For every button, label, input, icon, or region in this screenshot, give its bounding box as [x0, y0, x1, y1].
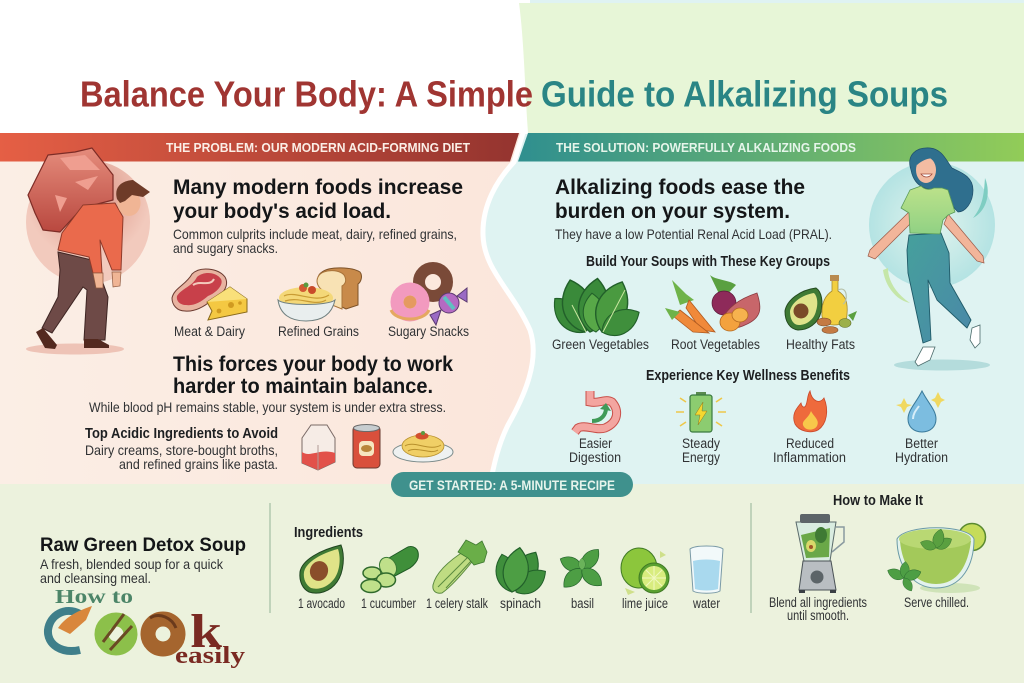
icon: flame: [794, 391, 827, 432]
icon: root vegetables: [665, 275, 760, 333]
icon: healthy fats: [785, 275, 857, 334]
title: [80, 74, 948, 114]
text: reduced inflammation: [773, 436, 846, 465]
heading: acid load: [173, 175, 463, 223]
icon: sugary snacks: [391, 268, 467, 325]
dividers: [270, 503, 751, 613]
heading: key groups: Build Your Soups with These Key Groups: [586, 254, 830, 270]
label: water: water: [692, 596, 720, 611]
heading: work harder: [173, 352, 453, 398]
icon: battery: [676, 392, 726, 432]
label: refined grains: Refined Grains: [278, 324, 359, 339]
text: blend step: Blend all ingredients: [769, 595, 867, 610]
text: steady energy: Steady: [682, 436, 720, 451]
label: root vegetables: Root Vegetables: [671, 337, 760, 352]
recipe description: and cleansing meal.: [40, 570, 151, 586]
text: reduced inflammation: Reduced: [786, 436, 834, 451]
label: sugary snacks: Sugary Snacks: [388, 324, 469, 339]
pill: get started: GET STARTED: A 5-MINUTE RECIPE: [409, 477, 615, 493]
illustration: woman walking: [868, 148, 995, 370]
icon: spinach: [492, 546, 551, 600]
label: celery: 1 celery stalk: [426, 596, 488, 611]
label: healthy fats: Healthy Fats: [786, 337, 855, 352]
recipe description: A fresh, blended soup for a quick: [40, 556, 224, 572]
text: PRAL: They have a low Potential Renal Acid Load (PRAL).: [555, 226, 832, 242]
logo: how to cook easily: easily: [175, 643, 245, 669]
text: steady energy: [682, 436, 720, 465]
label: cucumber: 1 cucumber: [361, 596, 416, 611]
text: easier digestion: Digestion: [569, 450, 621, 465]
heading: acid load: your body's acid load.: [173, 199, 391, 223]
heading: alkalizing foods: Alkalizing foods ease the: [555, 175, 805, 199]
text: easier digestion: Easier: [579, 436, 612, 451]
text block: acidic ingredients: and refined grains like pasta.: [119, 456, 278, 472]
label: avocado: 1 avocado: [298, 596, 345, 611]
heading: work harder: This forces your body to work: [173, 352, 453, 376]
label: green vegetables: Green Vegetables: [552, 337, 649, 352]
illustration: man carrying boulder: [26, 148, 150, 354]
icon: stomach: [575, 391, 617, 432]
icon: pasta plate: [393, 431, 453, 462]
icon: celery: [433, 540, 487, 593]
heading: ingredients: Ingredients: [294, 525, 363, 541]
text: common culprits: and sugary snacks.: [173, 240, 278, 256]
icon: green vegetables: [546, 276, 645, 342]
logo: how to cook easily: How to: [55, 586, 133, 608]
label: spinach: spinach: [500, 596, 541, 611]
icon: basil: [557, 545, 606, 592]
heading: alkalizing foods: burden on your system.: [555, 199, 790, 223]
title: Guide to Alkalizing Soups: [541, 74, 948, 114]
icon: blender: [796, 514, 844, 593]
heading: work harder: harder to maintain balance.: [173, 374, 433, 398]
text block: acidic ingredients: [85, 426, 278, 472]
heading: acid load: Many modern foods increase: [173, 175, 463, 199]
text: steady energy: Energy: [682, 450, 720, 465]
heading: alkalizing foods: [555, 175, 805, 223]
icon: water glass: [690, 546, 723, 593]
banner: the problem: [0, 133, 519, 162]
text: common culprits: [173, 226, 457, 256]
icon: can: [353, 424, 380, 468]
icon: refined grains: [278, 268, 361, 321]
banner: the problem: THE PROBLEM: OUR MODERN ACID-FORMING DIET: [166, 140, 470, 155]
icon: water drop: [896, 391, 945, 432]
heading: wellness benefits: Experience Key Wellness Benefits: [646, 368, 850, 384]
label: meat and dairy: Meat & Dairy: [174, 324, 245, 339]
icon: cucumber: [361, 546, 418, 592]
text: common culprits: Common culprits include meat, dairy, refined grains,: [173, 226, 457, 242]
text: serve step: Serve chilled.: [904, 595, 969, 610]
logo: how to cook easily: [48, 586, 245, 669]
text: easier digestion: [569, 436, 621, 465]
banner: the solution: [518, 133, 1024, 162]
text block: acidic ingredients: Top Acidic Ingredients to Avoid: [85, 426, 278, 442]
text: blend step: until smooth.: [787, 608, 849, 623]
icon: meat and dairy: [172, 269, 247, 320]
icon: avocado: [300, 545, 343, 593]
recipe description: [40, 556, 224, 586]
icon: lime: [621, 548, 669, 595]
logo: how to cook easily: k: [190, 605, 222, 658]
text block: acidic ingredients: Dairy creams, store-bought broths,: [85, 442, 278, 458]
icon: soup bowl: [886, 524, 986, 593]
text: better hydration: [895, 436, 948, 465]
heading: how to make it: How to Make It: [833, 493, 923, 509]
text: reduced inflammation: Inflammation: [773, 450, 846, 465]
banner: the solution: THE SOLUTION: POWERFULLY ALKALIZING FOODS: [556, 140, 856, 155]
recipe title: Raw Green Detox Soup: [40, 534, 246, 556]
text: better hydration: Hydration: [895, 450, 948, 465]
icon: milk carton: [302, 425, 335, 470]
text: blend step: [769, 595, 867, 623]
label: basil: basil: [571, 596, 594, 611]
label: lime juice: lime juice: [622, 596, 668, 611]
pill: get started: [391, 472, 633, 497]
title: Balance Your Body: A Simple: [80, 74, 533, 114]
text: blood pH: While blood pH remains stable, your system is under extra stress.: [89, 399, 446, 415]
text: better hydration: Better: [905, 436, 938, 451]
